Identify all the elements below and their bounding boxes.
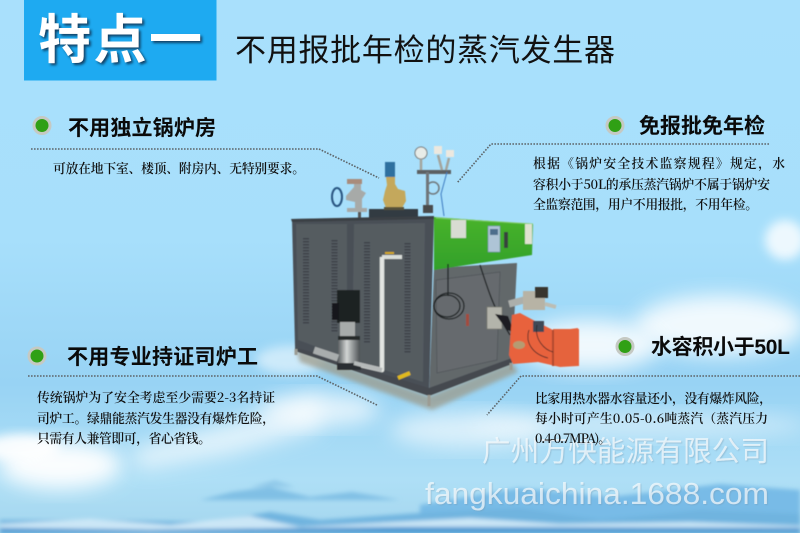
- body text: 每小时可产生0.05-0.6吨蒸汽（蒸汽压力: [535, 408, 768, 427]
- cabinet side: [429, 263, 517, 394]
- piping: [382, 255, 402, 259]
- feature: 不用专业持证司炉工: [28, 346, 377, 447]
- top fittings: [332, 146, 454, 218]
- heading: 免报批免年检: [639, 114, 765, 138]
- gate valve: [346, 184, 367, 212]
- body text: 只需有人兼管即可，省心省钱。: [37, 428, 211, 447]
- feature: 免报批免年检: [457, 114, 785, 213]
- coiled cable: [434, 264, 510, 335]
- body text: [535, 388, 772, 447]
- body text: [37, 387, 275, 447]
- icon: green dot: [29, 348, 45, 364]
- body text: 根据《锅炉安全技术监察规程》规定，水: [533, 153, 785, 172]
- feature: 不用独立锅炉房: [31, 116, 379, 178]
- body text: 0.4-0.7MPA)。: [535, 428, 611, 447]
- pump: [314, 290, 382, 370]
- body text: 司炉工。绿鼎能蒸汽发生器没有爆炸危险，: [37, 408, 275, 427]
- heading: 不用独立锅炉房: [68, 116, 216, 140]
- title badge: 特点一: 特点一: [38, 11, 202, 70]
- watermark text: fangkuaichina.1688.com: [425, 476, 769, 511]
- cabinet front: [292, 217, 434, 394]
- leader line: [28, 376, 377, 405]
- leader line: [457, 144, 769, 183]
- body text: 全监察范围，用户不用报批，不用年检。: [533, 194, 758, 213]
- gas train: [509, 287, 556, 310]
- base and feet: [295, 347, 512, 396]
- body text: 传统锅炉为了安全考虑至少需要2-3名持证: [37, 387, 275, 406]
- heading: 不用专业持证司炉工: [67, 346, 258, 369]
- title text: 不用报批年检的蒸汽发生器: [235, 33, 615, 68]
- orange burner: [509, 313, 579, 367]
- body text: 容积小于50L的承压蒸汽锅炉不属于锅炉安: [533, 174, 771, 193]
- watermark text: [425, 436, 769, 511]
- icon: green dot: [617, 338, 633, 354]
- body text: [533, 153, 785, 213]
- heading: 水容积小于50L: [651, 335, 790, 359]
- safety valve: [383, 177, 406, 208]
- feature: 水容积小于50L: [487, 335, 800, 447]
- gauge manifold: [417, 170, 451, 174]
- illustration: steam generator: [291, 146, 579, 410]
- watermark text: 广州万快能源有限公司: [482, 436, 769, 468]
- icon: green dot: [34, 118, 50, 134]
- floor shadow: [296, 349, 518, 410]
- body text: 可放在地下室、楼顶、附房内、无特别要求。: [53, 158, 305, 177]
- leader line: [31, 149, 379, 178]
- body text: 比家用热水器水容量还小，没有爆炸风险，: [535, 388, 772, 407]
- burner mount: [487, 307, 502, 329]
- title badge: 特点一: [24, 0, 216, 80]
- vent louvres: [306, 238, 408, 353]
- sensor: [466, 314, 469, 326]
- leader line: [487, 376, 800, 415]
- icon: green dot: [607, 118, 623, 134]
- green control housing: [434, 217, 533, 270]
